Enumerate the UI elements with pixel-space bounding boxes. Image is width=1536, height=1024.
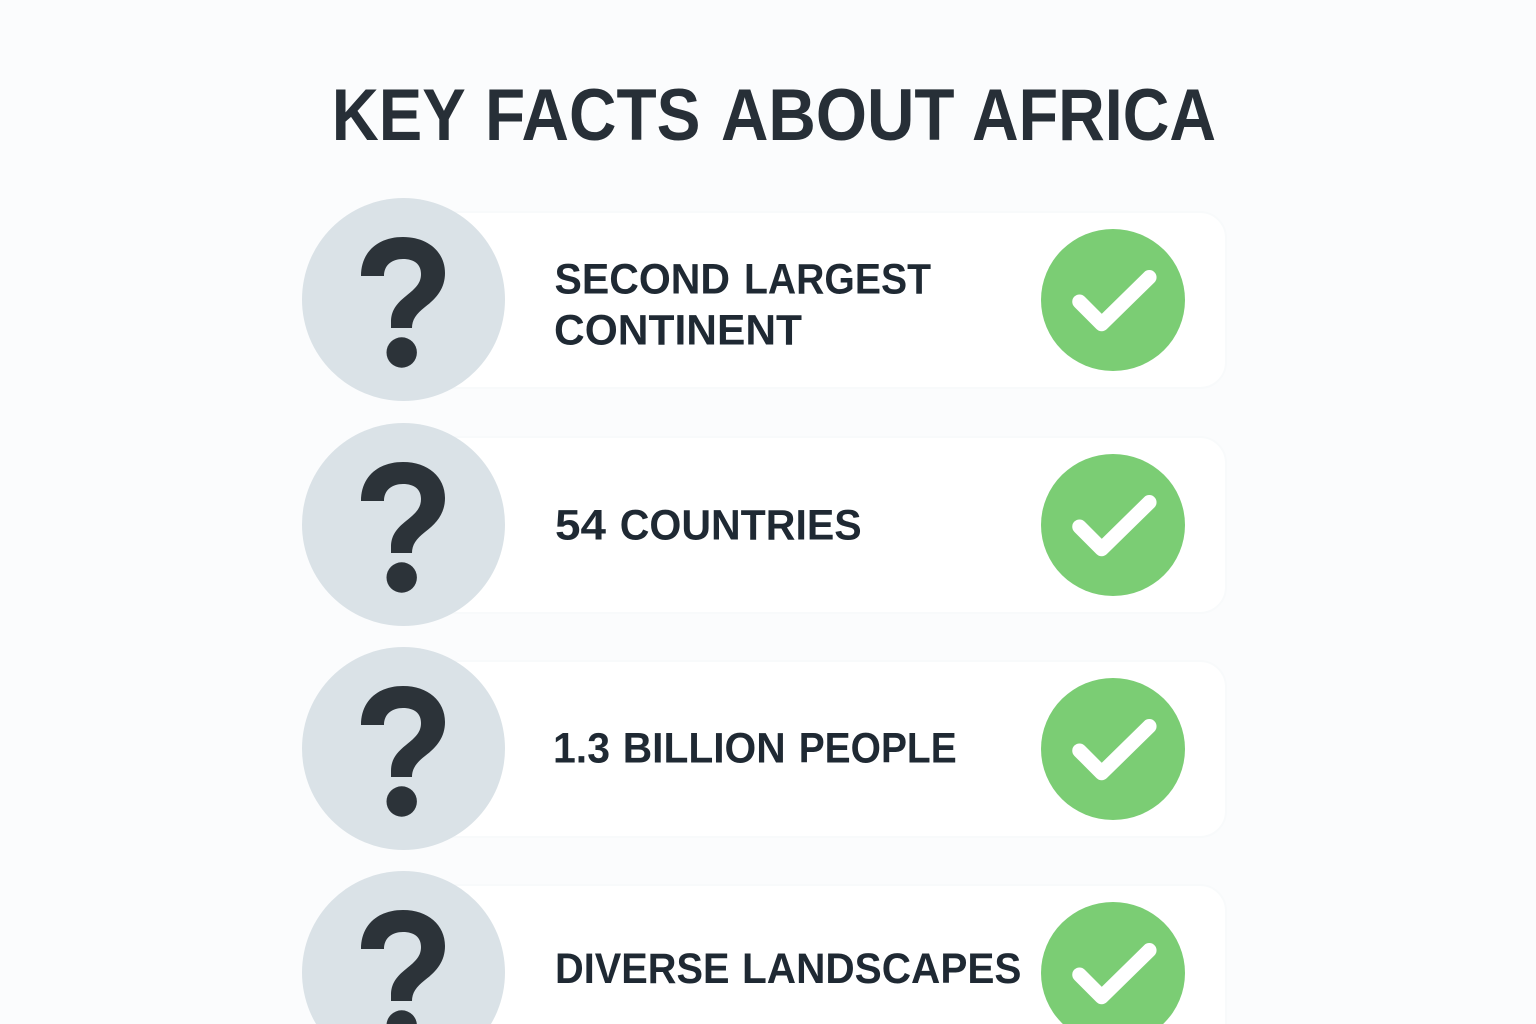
icon: green check bbox=[1041, 678, 1185, 820]
fact text: LARGEST bbox=[744, 256, 931, 304]
panel: 54 countries bbox=[302, 423, 1226, 626]
fact text: LANDSCAPES bbox=[742, 945, 1022, 993]
title: AFRICA bbox=[972, 75, 1216, 156]
fact text: 54 bbox=[555, 501, 606, 549]
fact text bbox=[553, 724, 957, 772]
fact text: 1.3 bbox=[553, 724, 610, 772]
icon: green check bbox=[1041, 229, 1185, 371]
card background bbox=[420, 885, 1226, 1024]
fact text: DIVERSE bbox=[555, 945, 730, 993]
fact text: COUNTRIES bbox=[620, 501, 862, 549]
icon: question mark circle bbox=[302, 198, 505, 401]
title: ABOUT bbox=[721, 75, 954, 156]
fact text: PEOPLE bbox=[799, 724, 957, 772]
card background bbox=[420, 437, 1226, 613]
icon: question mark circle bbox=[302, 423, 505, 626]
title: KEY bbox=[332, 75, 466, 156]
fact text: BILLION bbox=[623, 724, 786, 772]
fact text bbox=[554, 256, 931, 354]
fact text bbox=[555, 945, 1022, 993]
title: FACTS bbox=[485, 75, 700, 156]
panel: 1.3 billion people bbox=[302, 647, 1226, 850]
panel: second largest continent bbox=[302, 198, 1226, 401]
icon: question mark circle bbox=[302, 871, 505, 1024]
panel: diverse landscapes bbox=[302, 871, 1226, 1024]
card background bbox=[420, 661, 1226, 837]
title bbox=[332, 75, 1216, 156]
icon: question mark circle bbox=[302, 647, 505, 850]
fact text: CONTINENT bbox=[554, 306, 802, 354]
icon: green check bbox=[1041, 902, 1185, 1024]
icon: green check bbox=[1041, 454, 1185, 596]
fact text: SECOND bbox=[554, 256, 730, 304]
card background bbox=[420, 212, 1226, 388]
